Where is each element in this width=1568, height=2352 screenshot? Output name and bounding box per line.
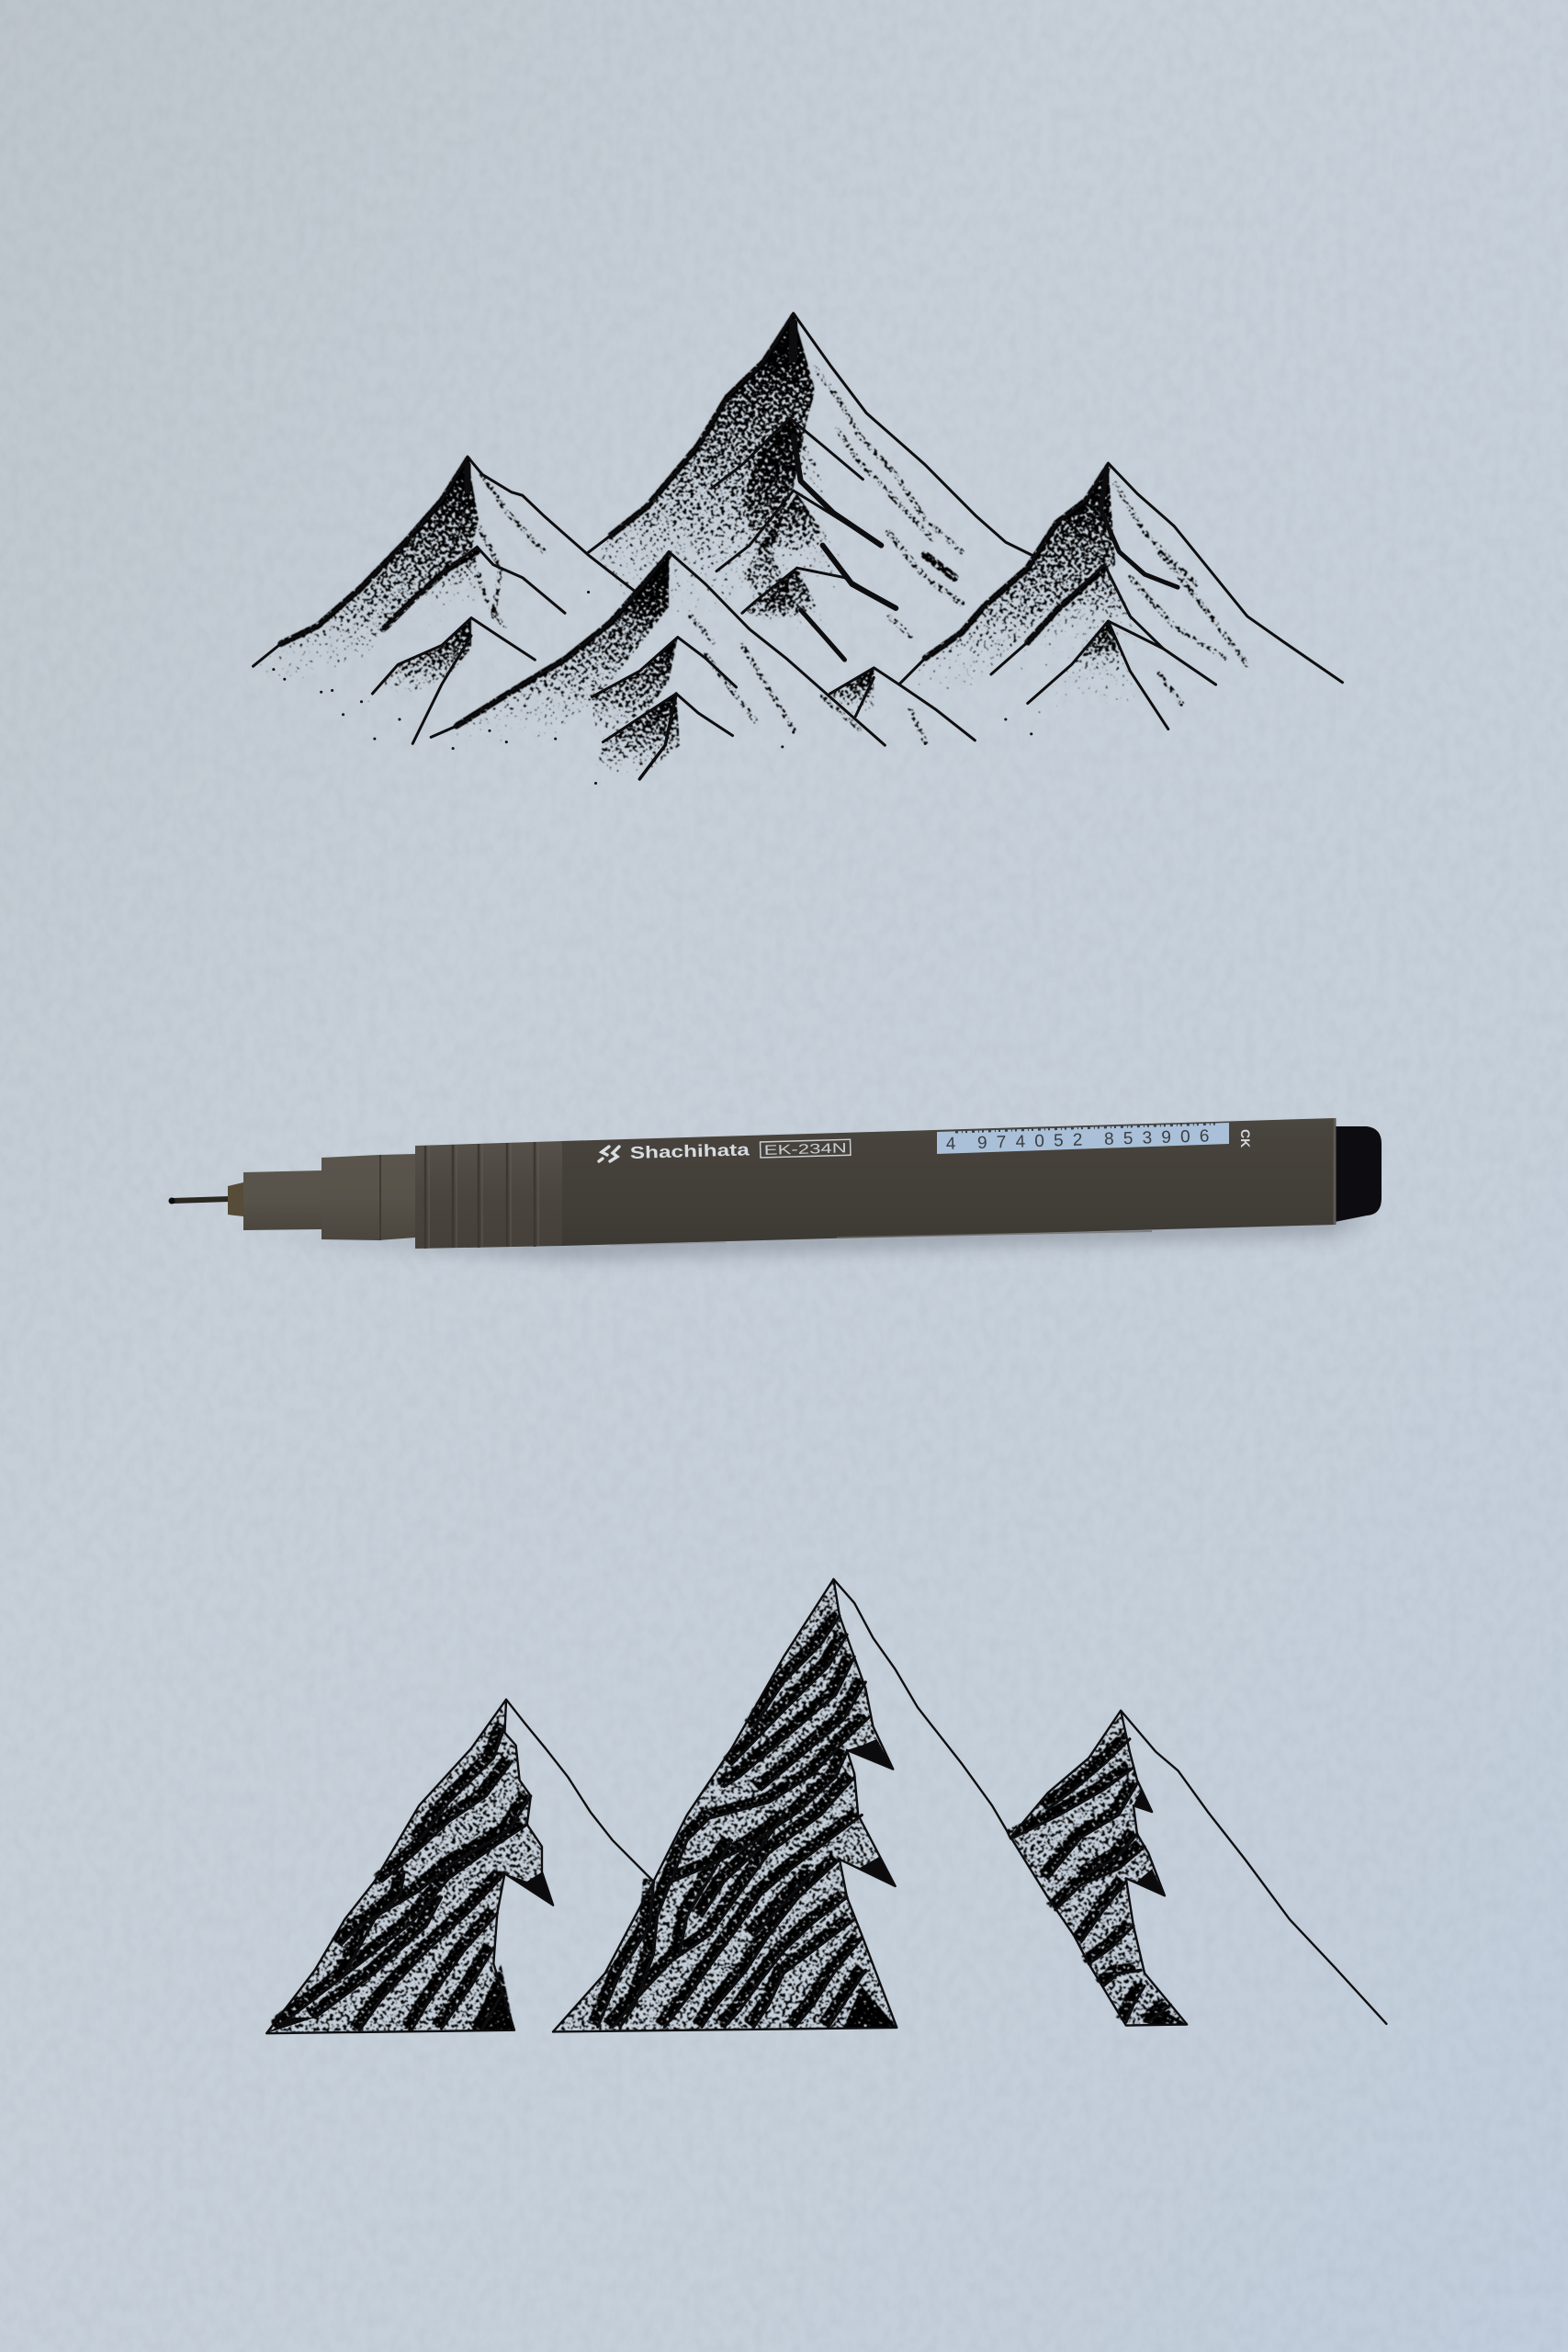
stippling on mountain faces	[254, 313, 1247, 779]
label letters: CK	[1238, 1129, 1253, 1148]
dark streak strokes	[277, 1616, 1170, 2030]
brand name: Shachihata	[630, 1139, 750, 1162]
pen front section	[321, 1154, 415, 1240]
drawing: dotwork mountain range (top)	[254, 313, 1342, 784]
stippled mountain fill	[266, 1579, 1187, 2033]
pen cap end	[1335, 1118, 1382, 1225]
dark tips of the jagged edges	[266, 1739, 1165, 2033]
model number box	[761, 1139, 851, 1159]
pen	[169, 1118, 1382, 1257]
ink outlines of the peaks	[254, 313, 1342, 779]
drawing: half-finished textured mountains (bottom)	[266, 1579, 1386, 2033]
pen shadow	[248, 1215, 1378, 1257]
barcode label: 4 974052 853906	[946, 1126, 1219, 1154]
scattered ink dots	[274, 592, 1181, 784]
mountain outlines	[266, 1579, 1386, 2033]
pen ribbed grip	[415, 1141, 562, 1249]
pen barrel	[562, 1118, 1335, 1246]
bold shadow strokes on the central peak	[468, 323, 1178, 660]
model number box: EK-234N	[764, 1140, 847, 1159]
pen nib	[169, 1182, 243, 1216]
pen cone section	[243, 1170, 321, 1230]
logo mark	[599, 1147, 619, 1161]
